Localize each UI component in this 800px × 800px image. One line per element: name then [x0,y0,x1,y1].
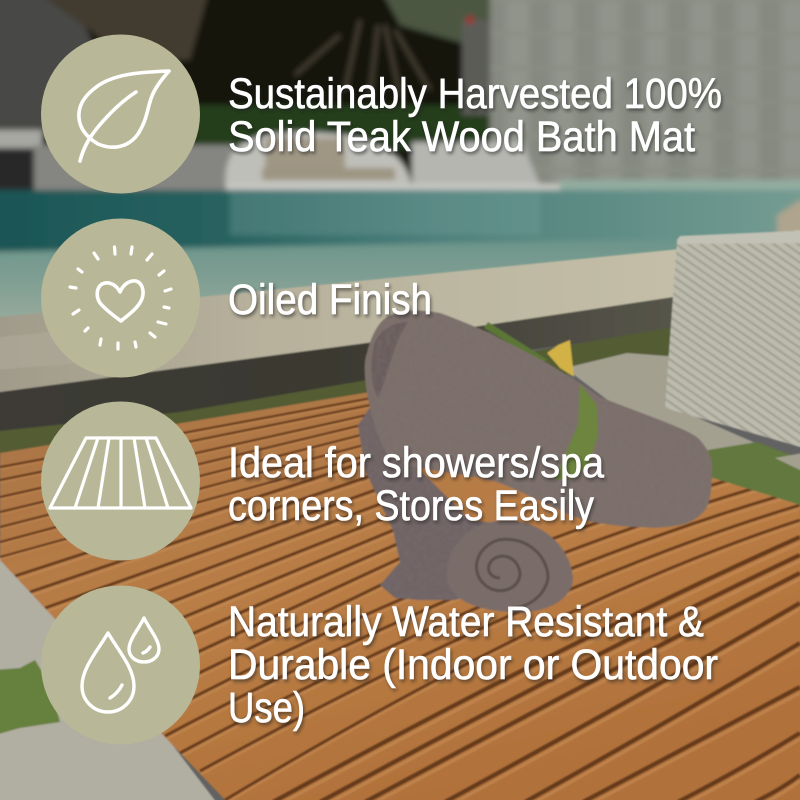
reflections in pool [230,192,540,235]
green ribbon [555,384,598,480]
towels [358,311,712,612]
near scene [0,230,800,800]
slat gaps [0,389,800,800]
red flower [466,16,474,24]
text: oiled finish: Oiled Finish [228,276,432,324]
blurred distant scene [0,0,800,330]
concrete, lower left [0,530,230,800]
tree foliage [370,0,545,45]
badge: heart [41,218,200,378]
slat highlights [0,392,800,800]
stone wall, right [490,0,800,188]
pool edge, far right [560,180,800,194]
badge: mat [41,402,200,560]
icon: heart with rays [70,247,171,349]
text: sustainably harvested: Sustainably Harvested 100% [228,70,722,118]
slab, far right [775,448,800,470]
left wall [0,0,100,135]
grey column [462,20,492,115]
text: water resistant [228,598,718,732]
pool water, shallow band [0,236,800,330]
icon: leaf [79,71,169,161]
pool water, deep band [0,190,800,252]
paving slab [565,353,800,520]
dark retaining wall [0,296,680,436]
stone weathering [0,325,200,372]
text: sustainably harvested [228,70,722,161]
grass tuft [0,660,60,742]
badge circle [41,402,200,560]
cushions [265,138,345,168]
grass right [708,442,800,512]
white ledge strip [226,184,576,192]
towel roll end folds [371,322,408,398]
text: ideal for showers: corners, Stores Easily [228,482,594,530]
small towel body [358,400,520,600]
badge: leaf [41,34,200,194]
icon: water drops [82,618,159,712]
grass strip [0,326,680,460]
white block [412,142,542,190]
leaf on towel [484,322,548,362]
seat pad [262,168,395,180]
tree trunk [5,0,215,60]
teak mat [0,380,800,800]
mat base [0,380,800,800]
dark garden backdrop [0,0,800,200]
yellow flower [547,340,574,377]
badge: water [41,586,200,744]
lounge bed [225,132,412,190]
text: water resistant: Naturally Water Resistant & [228,598,704,646]
badge circle [41,218,200,378]
text: ideal for showers: Ideal for showers/spa [228,439,604,487]
stone pool edge [0,249,680,397]
small towel roll [447,520,573,612]
text: water resistant: Use) [228,684,305,732]
towel spiral [476,539,548,608]
badge circle [41,586,200,744]
dark niche [0,148,34,192]
terrace wall [34,145,234,192]
text: water resistant: Durable (Indoor or Outdoor [228,641,718,689]
green hedge [195,105,490,150]
large towel roll [365,311,712,528]
cushion on cube [777,200,800,240]
badge circle [41,34,200,194]
icon: slatted mat [50,438,191,508]
cube top face [677,230,800,244]
text: ideal for showers [228,439,604,530]
text: sustainably harvested: Solid Teak Wood Bath Mat [228,113,695,161]
white wicker cube [665,230,800,458]
palm fronds [295,20,430,95]
white terrace ledge [0,130,42,150]
